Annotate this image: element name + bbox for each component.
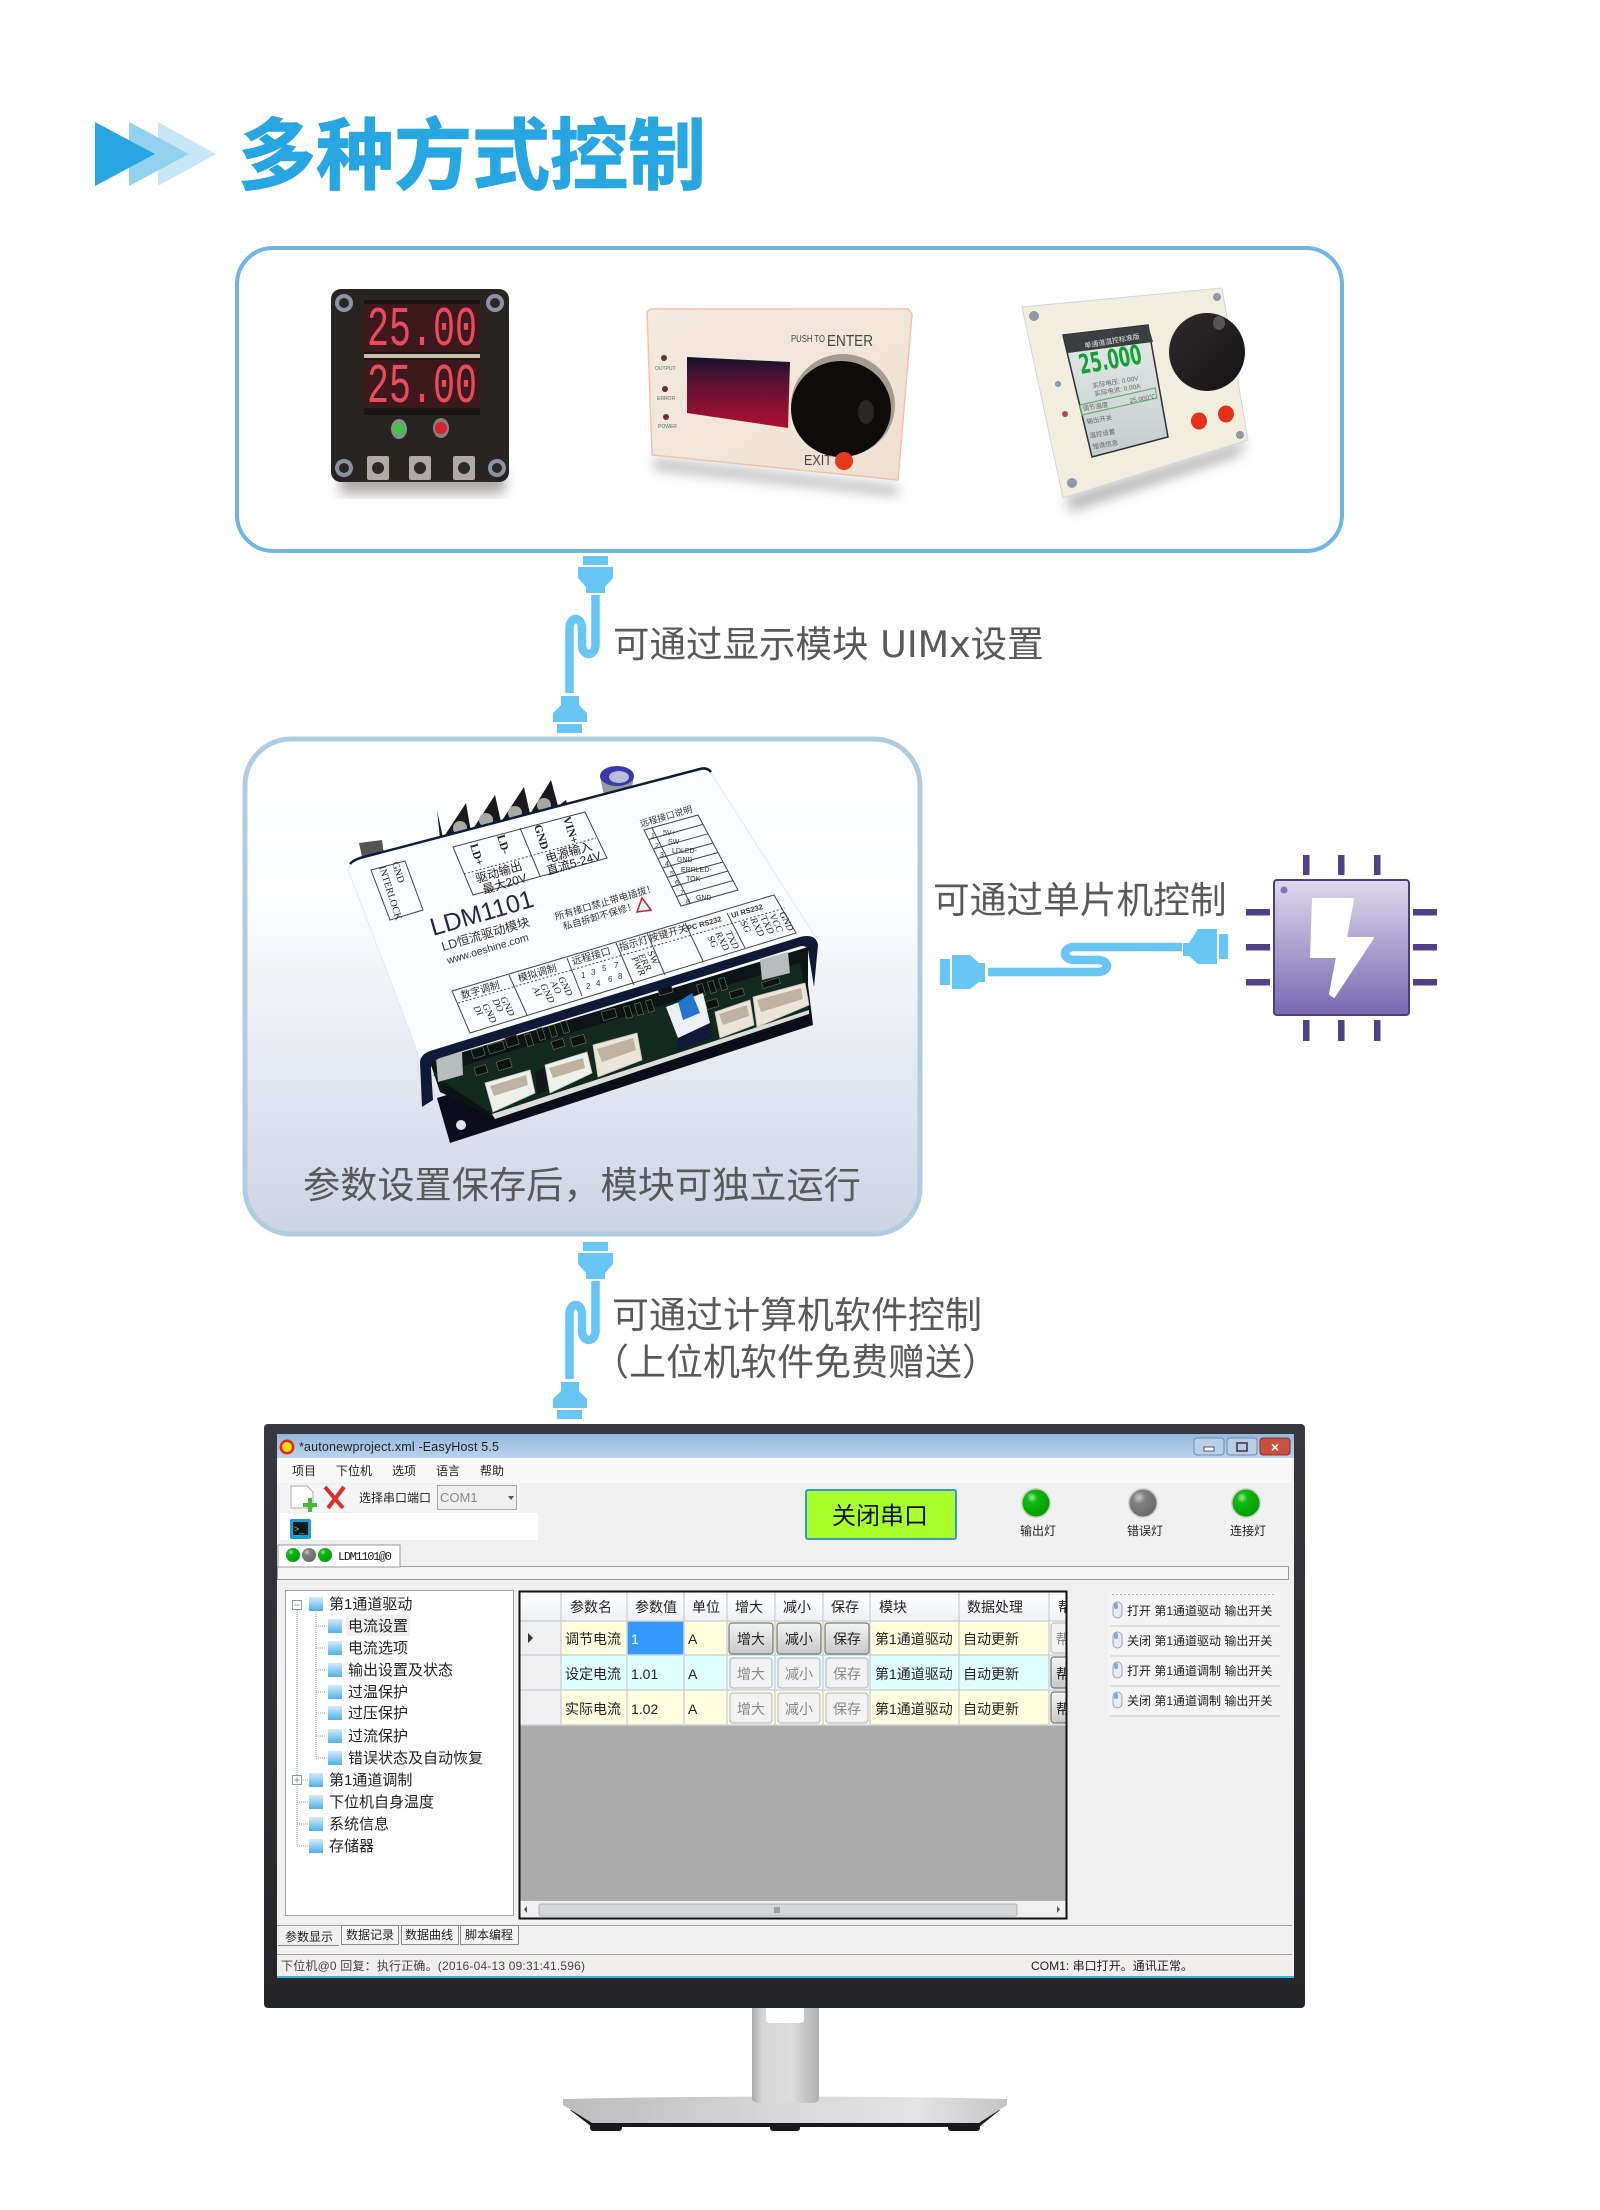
remote interface table: GND	[677, 857, 693, 864]
warning text: 私自拆卸不保修！	[561, 900, 638, 933]
product subtitle: LD恒流驱动模块	[440, 915, 532, 954]
row 2: 设定电流	[565, 1666, 621, 1682]
row 1: 增大	[737, 1631, 765, 1647]
monitor stand	[563, 2008, 1007, 2131]
tree labels: 电流设置	[348, 1618, 408, 1635]
header labels: 模块	[879, 1599, 907, 1615]
parameter grid	[519, 1591, 1086, 1919]
grid header	[520, 1592, 1066, 1608]
bottom tabs: 脚本编程	[465, 1927, 513, 1942]
status bar	[277, 1954, 1292, 1976]
device: LED display board	[331, 289, 509, 494]
row 3: 第1通道驱动	[875, 1701, 953, 1717]
label: display module: 可通过显示模块 UIMx设置	[613, 623, 1044, 666]
bottom header labels: 模拟调制	[516, 961, 558, 985]
remote port numbers: 2	[586, 982, 591, 991]
product name: LDM1101	[427, 885, 537, 942]
selected row	[346, 1614, 410, 1636]
monitor	[264, 1424, 1305, 2131]
application window	[277, 1434, 1294, 1978]
knob	[1169, 313, 1245, 391]
row backgrounds	[519, 1621, 1067, 1901]
row 3: A	[688, 1701, 698, 1717]
header labels: 帮助	[1058, 1599, 1086, 1615]
script toolbar: >_	[294, 1524, 305, 1534]
panel: display modules	[237, 248, 1342, 551]
connector pins	[490, 988, 803, 1096]
row 1: 调节电流	[565, 1631, 621, 1647]
pcb components	[471, 977, 780, 1076]
title	[95, 94, 706, 206]
header labels: 减小	[783, 1599, 811, 1615]
remote interface table: LDLED-	[672, 848, 698, 855]
label: MCU control: 可通过单片机控制	[933, 879, 1227, 922]
row 3: 保存	[833, 1701, 861, 1717]
bottom pin labels: SG	[704, 935, 719, 949]
terminal labels: LD+	[467, 842, 485, 867]
remote interface table: ERRLED-	[681, 867, 712, 874]
bottom pin labels: SW	[644, 950, 660, 966]
tree labels: 下位机自身温度	[329, 1794, 434, 1811]
row 2: A	[688, 1666, 698, 1682]
toolbar	[280, 1484, 538, 1540]
status dots: OUTPUT	[655, 366, 676, 372]
remote interface table: 远程接口说明	[638, 803, 693, 829]
tree labels: 系统信息	[329, 1816, 389, 1833]
cable: display module to driver	[553, 556, 613, 733]
menu bar: 帮助	[480, 1464, 504, 1478]
pcb	[433, 963, 809, 1114]
bottom pin labels: GND	[537, 983, 556, 1004]
bottom pin labels: GND	[776, 911, 795, 932]
heading text: 多种方式控制	[238, 94, 706, 206]
menu bar: 语言	[436, 1464, 460, 1478]
serial port button: 关闭串口	[832, 1503, 928, 1530]
red buttons	[1191, 406, 1234, 430]
row 2: 帮助	[1056, 1666, 1084, 1682]
bottom pin labels: AI	[529, 986, 543, 998]
push buttons	[367, 456, 475, 480]
row 1: 第1通道驱动	[875, 1631, 953, 1647]
port combobox: COM1	[440, 1490, 478, 1505]
remote port numbers: 1	[581, 971, 586, 980]
push switch	[666, 993, 712, 1051]
tree labels: 电流选项	[348, 1640, 408, 1657]
menu bar: 项目	[292, 1464, 316, 1478]
header labels	[570, 1600, 1066, 1614]
lightning bolt	[1311, 899, 1373, 997]
screen title: 单通道温控标准版	[1084, 332, 1140, 350]
row 3: 减小	[785, 1701, 813, 1717]
label: computer software: （上位机软件免费赠送）	[592, 1341, 999, 1384]
icon: triple chevron arrows	[95, 122, 216, 186]
script toolbar	[280, 1513, 538, 1540]
screen menu rows: 25.000℃	[1129, 393, 1157, 405]
white top face	[348, 769, 816, 1058]
warning text: 所有接口禁止带电插拔！	[553, 882, 657, 923]
bottom pin labels: DO	[489, 998, 505, 1013]
capacitor	[600, 766, 634, 806]
row 3	[566, 1702, 1066, 1716]
row 2	[566, 1666, 1066, 1680]
remote interface table: 4	[665, 861, 669, 868]
chip pins	[1246, 855, 1437, 1041]
standoffs	[436, 952, 790, 1082]
screen menu rows: 错误信息	[1092, 438, 1119, 451]
screen menu rows: 调节温度	[1082, 400, 1109, 413]
terminal labels: VIN+	[560, 815, 580, 845]
remote port numbers: 3	[591, 968, 596, 977]
command labels: 打开 第1通道调制 输出开关	[1127, 1663, 1272, 1678]
jumper	[535, 1068, 548, 1095]
interlock labels: INTERLOCK	[376, 865, 404, 922]
row 2: 减小	[785, 1666, 813, 1682]
icon: microcontroller chip	[1246, 855, 1437, 1041]
bottom tabs: 数据记录	[346, 1927, 394, 1942]
terminal labels	[467, 815, 580, 867]
cable: computer to driver	[553, 1242, 613, 1419]
row arrow	[528, 1633, 533, 1643]
bottom tabs	[277, 1926, 1292, 1946]
window title: *autonewproject.xml -EasyHost 5.5	[299, 1440, 499, 1454]
status bar: COM1: 串口打开。通讯正常。	[1031, 1959, 1193, 1973]
tree labels: 第1通道驱动	[329, 1595, 412, 1613]
bottom pin labels	[470, 911, 795, 1024]
bottom pin labels: TXD	[722, 930, 741, 950]
remote interface table: 3	[660, 852, 664, 859]
row 3: 实际电流	[565, 1701, 621, 1717]
row 1	[566, 1632, 1066, 1646]
row 2: 自动更新	[963, 1666, 1019, 1682]
readout lower: 25.00	[367, 355, 477, 419]
screen menu rows: 输出开关	[1086, 413, 1113, 426]
connectors	[485, 983, 809, 1112]
remote interface table: SW	[668, 839, 680, 846]
row 1: 帮助	[1056, 1631, 1084, 1647]
screen value: 25.000	[1076, 340, 1144, 381]
module photo	[348, 766, 818, 1143]
bottom header labels: 远程接口	[570, 944, 612, 968]
app icon	[280, 1440, 294, 1454]
tree labels: 过温保护	[348, 1684, 408, 1701]
row 1: 保存	[833, 1631, 861, 1647]
bottom header labels: 数字调制	[459, 978, 501, 1002]
tree labels: 输出设置及状态	[348, 1662, 453, 1679]
header labels: 数据处理	[967, 1599, 1023, 1615]
bottom header labels: 指示灯	[617, 933, 650, 954]
panel text: PUSH TO	[791, 334, 825, 345]
device: touch screen module	[1022, 288, 1248, 512]
tree labels: 过流保护	[348, 1728, 408, 1745]
bottom pin labels: AO	[547, 980, 563, 995]
row 2: 保存	[833, 1666, 861, 1682]
bottom pin labels: VCC	[766, 913, 785, 933]
screen menu rows: 实际电压: 0.00V	[1092, 373, 1140, 390]
remote interface table: 2	[655, 843, 659, 850]
remote port numbers	[581, 961, 623, 991]
bottom pin labels: DI	[470, 1005, 484, 1017]
command labels: 打开 第1通道驱动 输出开关	[1127, 1603, 1272, 1618]
device tab: LDM1101@0	[338, 1550, 392, 1564]
bottom pin labels: PWR	[628, 956, 647, 978]
status dots: POWER	[658, 424, 677, 430]
icon: new file	[291, 1486, 317, 1512]
red button	[835, 452, 853, 470]
row 2: 第1通道驱动	[875, 1666, 953, 1682]
bottom tabs: 参数显示	[285, 1929, 333, 1944]
command list	[1108, 1592, 1280, 1716]
bottom header labels	[459, 902, 764, 1002]
remote interface table: 1	[651, 833, 655, 840]
header labels: 参数名	[570, 1599, 612, 1615]
remote port numbers: 5	[602, 964, 607, 973]
row 3: 帮助	[1056, 1701, 1084, 1717]
interior	[430, 947, 808, 1118]
bottom header labels: 按键开关	[647, 921, 689, 945]
tree folder icons	[309, 1597, 342, 1853]
terminal captions: 最大20V	[481, 871, 528, 897]
status lights	[1020, 1488, 1266, 1538]
icon: red cross	[325, 1487, 344, 1508]
remote port numbers: 6	[608, 975, 613, 984]
command labels	[1127, 1603, 1272, 1708]
terminal captions: 电源输入	[544, 838, 594, 866]
interlock labels: GND	[389, 861, 406, 884]
row 3: 1.02	[631, 1701, 658, 1717]
bottom pin labels: RXD	[747, 917, 766, 938]
bottom header labels: UI RS232	[730, 902, 764, 920]
remote interface table: 7	[680, 890, 684, 897]
tree expand boxes	[292, 1600, 302, 1784]
remote interface table	[638, 803, 712, 906]
terminal captions: 驱动输出	[474, 858, 524, 886]
tree labels: 错误状态及自动恢复	[348, 1749, 483, 1767]
screen menu rows	[1080, 373, 1157, 451]
bottom tabs: 数据曲线	[405, 1927, 453, 1942]
label: computer software: 可通过计算机软件控制	[612, 1294, 982, 1337]
bottom pin labels: ERR	[635, 953, 653, 973]
row 1: A	[688, 1631, 698, 1647]
base plate	[437, 985, 813, 1143]
panel: driver module	[245, 739, 920, 1234]
face printed lines	[371, 812, 796, 1033]
monitor bezel	[264, 1424, 1305, 2008]
terminal captions	[474, 838, 603, 897]
tree labels: 过压保护	[348, 1705, 408, 1722]
terminal labels: GND	[531, 823, 550, 851]
horizontal scrollbar	[524, 1904, 1060, 1916]
header labels: 增大	[735, 1599, 763, 1615]
bottom pin labels: GND	[497, 996, 516, 1017]
port label: 选择串口端口	[359, 1491, 431, 1505]
row 1: 1	[631, 1631, 639, 1647]
remote port numbers: 8	[618, 972, 623, 981]
tree panel	[286, 1590, 514, 1916]
status dots: ERROR	[657, 396, 675, 402]
device tab	[278, 1545, 1288, 1580]
status dots	[655, 355, 677, 430]
terminal captions: 直流5-24V	[545, 849, 603, 878]
bottom pin labels: GND	[555, 976, 574, 997]
header labels: 保存	[831, 1599, 859, 1615]
screws	[453, 798, 551, 835]
exit label: EXIT	[804, 452, 832, 469]
window controls: ×	[1271, 1439, 1279, 1455]
remote port numbers: 4	[596, 979, 601, 988]
window controls	[1194, 1438, 1290, 1455]
indicator LEDs	[391, 418, 449, 439]
header labels: 参数值	[635, 1599, 677, 1615]
bottom pin labels: SG	[737, 920, 752, 934]
command labels: 关闭 第1通道驱动 输出开关	[1127, 1633, 1272, 1648]
enter label: ENTER	[827, 333, 873, 350]
bottom pin labels: RXD	[712, 931, 731, 952]
title bar	[277, 1434, 1294, 1458]
tree labels: 存储器	[329, 1838, 374, 1855]
cable: MCU to driver	[940, 929, 1228, 989]
status bar: 下位机@0 回复：执行正确。(2016-04-13 09:31:41.596)	[281, 1958, 585, 1973]
icon: warning triangle	[637, 898, 651, 912]
menu bar: 下位机	[336, 1463, 372, 1478]
panel caption: 参数设置保存后，模块可独立运行	[303, 1163, 861, 1207]
remote interface table: GND	[696, 895, 712, 902]
status lights: 连接灯	[1230, 1523, 1266, 1538]
screen menu rows: 实际电流: 0.00A	[1094, 381, 1142, 398]
dark enclosure lip	[420, 936, 818, 1107]
bottom header labels: PC RS232	[686, 914, 723, 933]
terminal labels: LD-	[494, 833, 512, 856]
port combobox	[438, 1486, 516, 1510]
tree labels	[329, 1595, 483, 1855]
remote interface table: 8	[686, 899, 690, 906]
website: www.oeshine.com	[445, 932, 530, 967]
touch screen	[1063, 325, 1168, 457]
row 1: 减小	[785, 1631, 813, 1647]
status lights: 输出灯	[1020, 1523, 1056, 1538]
remote interface table: 6	[675, 880, 679, 887]
screen menu rows: 温控设置	[1089, 427, 1116, 440]
serial port button	[806, 1490, 956, 1539]
menu bar: 选项	[392, 1464, 416, 1478]
menu bar	[277, 1458, 1292, 1483]
row 3: 增大	[737, 1701, 765, 1717]
row 2: 增大	[737, 1666, 765, 1682]
remote port numbers: 7	[614, 961, 619, 970]
remote interface table: 5V+	[663, 830, 676, 837]
mouse icons	[1113, 1602, 1122, 1708]
terminal block	[437, 780, 572, 860]
bottom pin labels: TXD	[757, 915, 776, 935]
status lights: 错误灯	[1127, 1524, 1163, 1538]
row 1: 自动更新	[963, 1631, 1019, 1647]
readout upper: 25.00	[367, 298, 477, 362]
row buttons	[729, 1623, 1081, 1723]
tree labels: 第1通道调制	[329, 1771, 412, 1789]
remote interface table: 5	[670, 871, 674, 878]
row 2: 1.01	[631, 1666, 658, 1682]
command labels: 关闭 第1通道调制 输出开关	[1127, 1693, 1272, 1708]
device: knob display box	[647, 309, 912, 496]
header labels: 单位	[692, 1599, 720, 1615]
remote interface table: TOK	[686, 876, 701, 883]
bottom pin labels: GND	[479, 1003, 498, 1024]
interlock switch	[359, 840, 384, 866]
row 3: 自动更新	[963, 1701, 1019, 1717]
label: computer software	[592, 1294, 999, 1384]
